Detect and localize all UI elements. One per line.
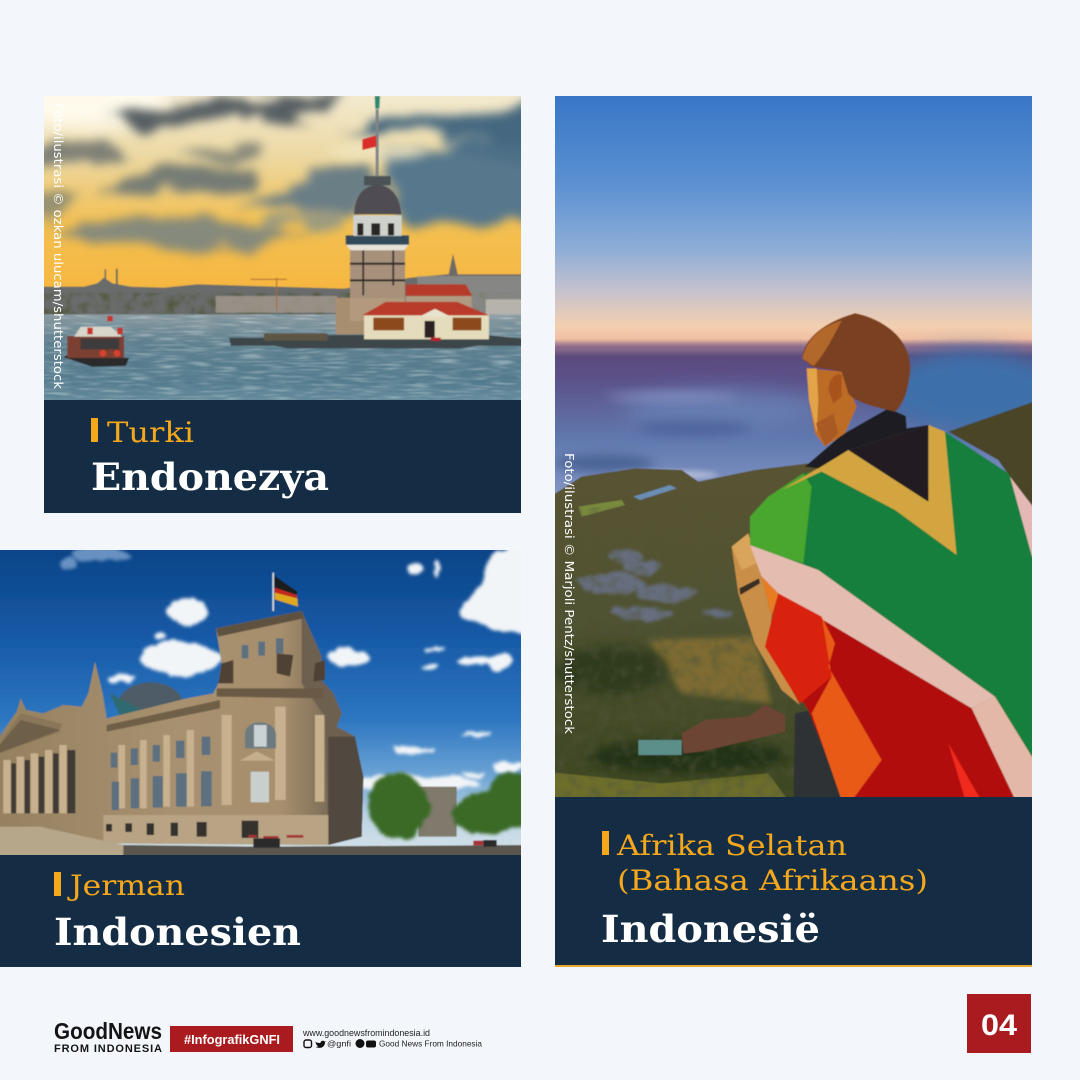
rear red roof — [406, 284, 472, 296]
tower — [336, 96, 409, 334]
sea — [44, 314, 521, 400]
page number: 04 — [981, 1009, 1017, 1042]
label panel: Afrika Selatan — [555, 797, 1032, 967]
foreground ground — [122, 844, 521, 855]
photo: Reichstag Berlin — [0, 540, 535, 865]
photo: man with South African flag — [555, 96, 1032, 797]
arm — [732, 533, 800, 705]
country name: Turki — [107, 416, 194, 449]
skyline — [34, 274, 537, 314]
sea — [555, 348, 1032, 494]
photo: Maiden's Tower Istanbul — [44, 96, 521, 400]
hashtag badge: #InfografikGNFI — [184, 1033, 280, 1047]
contact details: www.goodnewsfromindonesia.id — [302, 1028, 430, 1038]
word for Indonesia: Indonesië — [601, 907, 820, 951]
contact details — [302, 1028, 482, 1048]
building — [0, 573, 363, 845]
label panel: Jerman — [0, 855, 521, 967]
contact details: Good News From Indonesia — [379, 1038, 482, 1048]
hashtag badge — [170, 1026, 293, 1052]
contact details: @gnfi — [327, 1038, 351, 1048]
panel: Jerman — [0, 540, 535, 967]
photo credit: Afrika Selatan: Foto/ilustrasi © Marjoli Pentz/shutterstock — [562, 453, 577, 735]
icon: twitter — [315, 1041, 326, 1048]
word for Indonesia: Endonezya — [91, 455, 329, 499]
panel: Turki — [44, 96, 521, 513]
label panel: Turki — [44, 400, 521, 513]
windows — [111, 638, 283, 810]
restaurant — [362, 302, 489, 339]
country name: Afrika Selatan — [616, 829, 847, 862]
town — [577, 550, 733, 620]
hair — [802, 313, 910, 412]
icon: youtube — [366, 1040, 376, 1048]
man — [732, 313, 1048, 810]
coastal land — [545, 463, 1048, 810]
page number — [967, 994, 1031, 1053]
flag — [750, 408, 1048, 810]
base — [103, 815, 328, 845]
logo: GoodNews From Indonesia: GoodNews — [54, 1018, 162, 1044]
flag — [272, 573, 274, 611]
icon: instagram — [304, 1040, 312, 1048]
footer — [54, 994, 1031, 1055]
columns — [3, 707, 324, 813]
icon: facebook — [356, 1039, 364, 1048]
trees and far building — [418, 787, 457, 837]
word for Indonesia: Indonesien — [54, 910, 301, 954]
photo credit: Turki: Foto/ilustrasi © ozkan ulucam/shutterstock — [51, 103, 66, 390]
logo: GoodNews From Indonesia — [54, 1018, 162, 1055]
logo: GoodNews From Indonesia: FROM INDONESIA — [54, 1043, 162, 1055]
language note: (Bahasa Afrikaans) — [617, 864, 928, 897]
panel: Afrika Selatan — [535, 96, 1058, 967]
statues and tower shadow — [218, 653, 325, 683]
boat — [64, 316, 129, 367]
country name: Jerman — [67, 869, 185, 902]
pier — [229, 335, 534, 348]
neck and face — [807, 368, 857, 447]
